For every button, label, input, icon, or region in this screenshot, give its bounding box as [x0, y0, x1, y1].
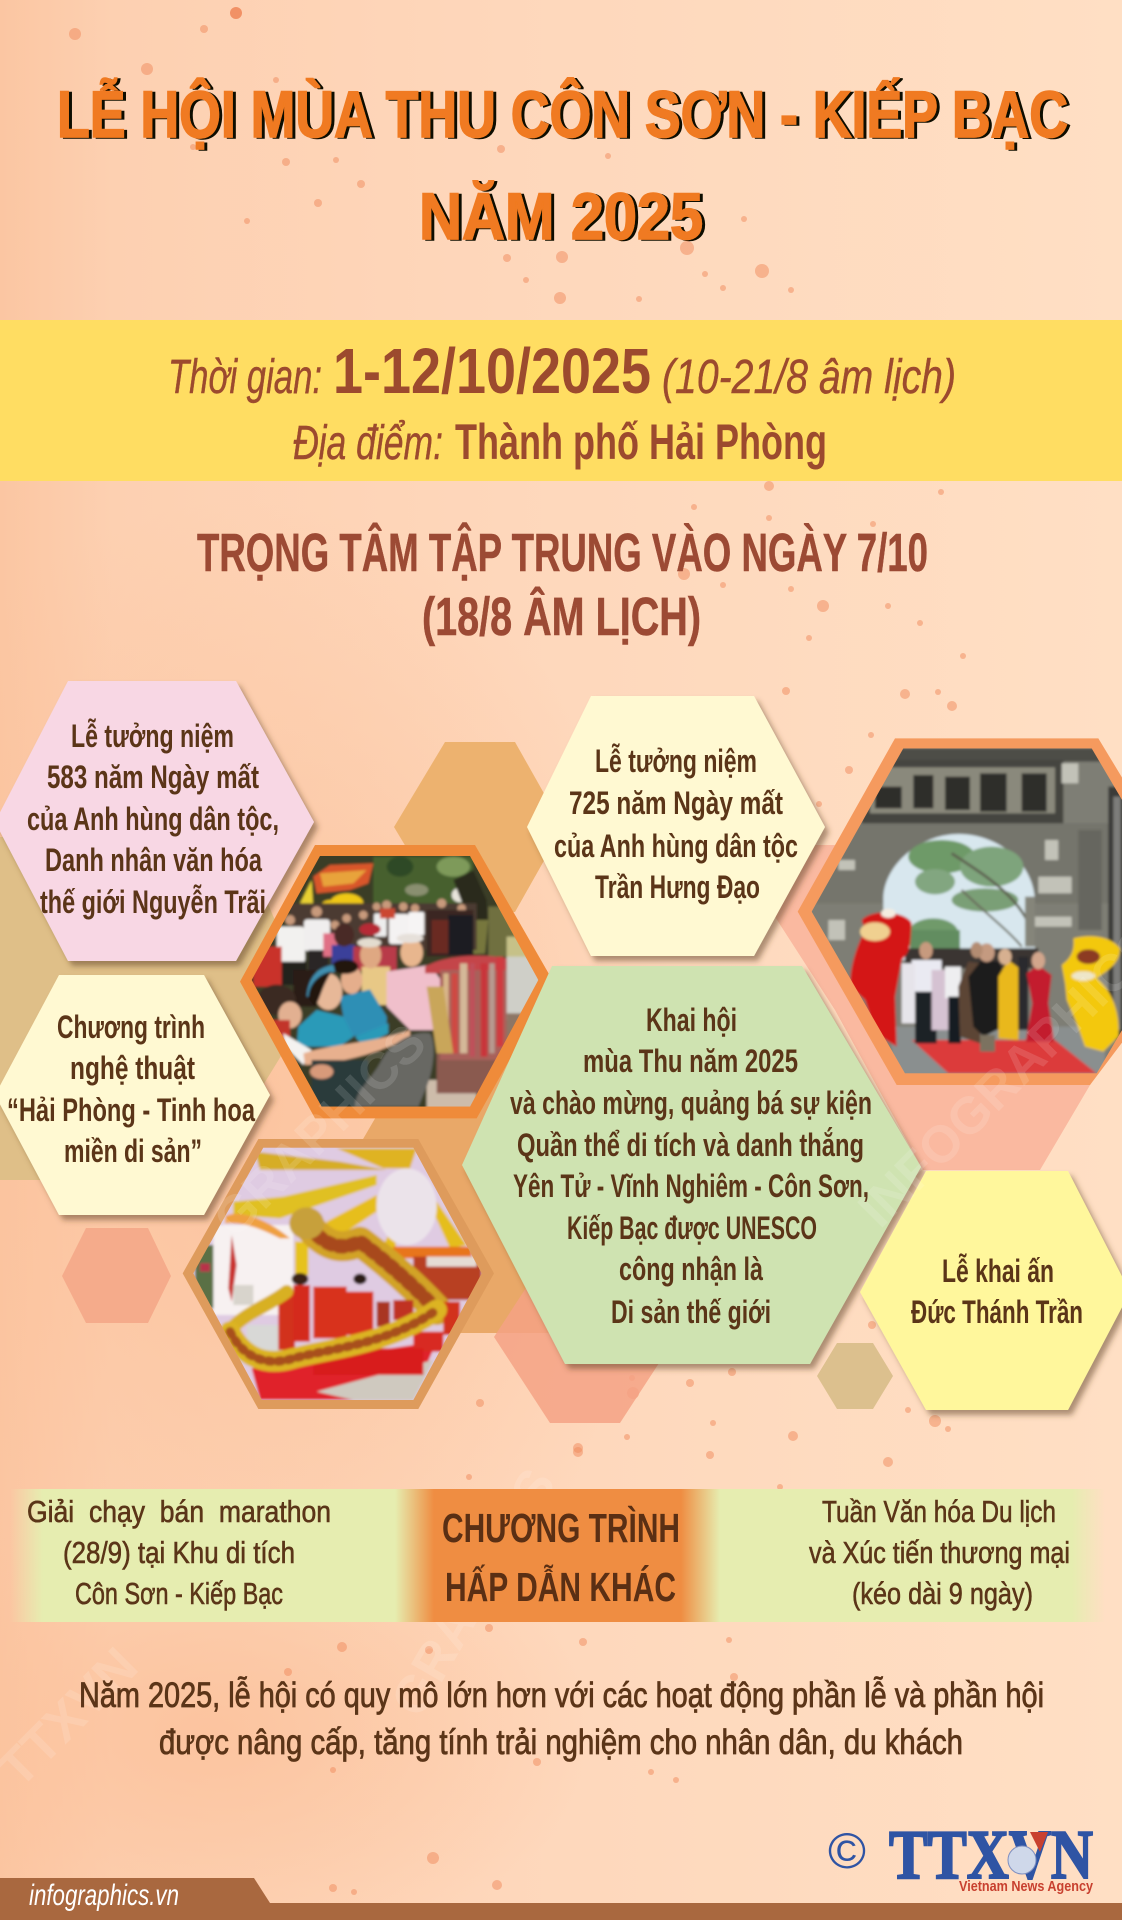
panel: art programme: miền di sản” [64, 1133, 202, 1169]
upper dragon body [308, 1225, 437, 1310]
watermarks [0, 916, 1122, 1798]
photo: dragon dance [180, 1135, 500, 1422]
right programme: tourism and trade week: Tuần Văn hóa Du lịch [822, 1494, 1056, 1529]
yellow time and place band: (10-21/8 âm lịch) [662, 351, 956, 404]
panel: autumn festival opening: Kiếp Bạc được UNESCO [567, 1210, 817, 1246]
summary text: được nâng cấp, tăng tính trải nghiệm cho nhân dân, du khách [159, 1723, 963, 1762]
footer site name: infographics.vn [29, 1879, 179, 1912]
photo: gate with lion dance [795, 730, 1122, 1097]
panel: autumn festival opening: Di sản thế giới [611, 1294, 771, 1330]
right programme: tourism and trade week [809, 1494, 1070, 1611]
watermarks: GRAPHICS [202, 1013, 438, 1248]
other programmes band [10, 1489, 1105, 1622]
panel: Trần Hưng Đạo memorial: của Anh hùng dân tộc [554, 828, 798, 864]
yellow time and place band: Thành phố Hải Phòng [455, 414, 827, 470]
panel: Nguyễn Trãi memorial: của Anh hùng dân tộc, [27, 801, 279, 837]
panel: Nguyễn Trãi memorial: Danh nhân văn hóa [45, 842, 262, 878]
left programme: half marathon: (28/9) tại Khu di tích [63, 1535, 295, 1570]
photo: incense offering ceremony [240, 840, 560, 1127]
panel: autumn festival opening: Yên Tử - Vĩnh Nghiêm - Côn Sơn, [513, 1168, 869, 1204]
panel: Trần Hưng Đạo memorial: 725 năm Ngày mất [569, 785, 783, 821]
yellow time and place band [0, 320, 1122, 481]
logo: TTXVN copyright: © [828, 1823, 866, 1879]
title [57, 77, 1068, 253]
panel: art programme: nghệ thuật [70, 1050, 195, 1086]
panel: Trần Hưng Đạo memorial: Trần Hưng Đạo [595, 869, 760, 905]
panel: autumn festival opening: và chào mừng, quảng bá sự kiện [510, 1085, 872, 1121]
right programme: tourism and trade week: (kéo dài 9 ngày) [852, 1576, 1033, 1611]
centre heading: other attractive programmes [442, 1505, 680, 1610]
yellow time and place band: Thời gian: [168, 351, 322, 404]
heading: focus date: (18/8 ÂM LỊCH) [422, 586, 701, 647]
watermarks: GRAPHICS [380, 1459, 568, 1726]
centre heading: other attractive programmes: CHƯƠNG TRÌNH [442, 1505, 680, 1551]
panel: autumn festival opening: công nhận là [619, 1251, 763, 1287]
panel: Trần Hưng Đạo memorial [527, 696, 825, 956]
panel: art programme: Chương trình [57, 1009, 205, 1045]
speckles [69, 7, 966, 1895]
decorative background hexagons [0, 742, 1122, 1423]
panel: art programme: “Hải Phòng - Tinh hoa [7, 1092, 255, 1128]
summary text [79, 1676, 1044, 1762]
right programme: tourism and trade week: và Xúc tiến thương mại [809, 1535, 1070, 1570]
panel: Đức Thánh Trần seal ceremony: Lễ khai ấn [942, 1253, 1054, 1289]
heading: focus date [197, 522, 928, 647]
centre heading: other attractive programmes: HẤP DẪN KHÁC [445, 1564, 676, 1610]
panel: autumn festival opening: mùa Thu năm 2025 [583, 1043, 798, 1079]
yellow time and place band: 1-12/10/2025 [333, 335, 651, 407]
panel: art programme [0, 975, 270, 1215]
panel: Nguyễn Trãi memorial: thế giới Nguyễn Trãi [40, 884, 266, 920]
left programme: half marathon: Côn Sơn - Kiếp Bạc [75, 1576, 283, 1611]
left programme: half marathon: Giải chạy bán marathon [27, 1494, 331, 1529]
logo: TTXVN copyright: Vietnam News Agency [959, 1878, 1094, 1895]
panel: Nguyễn Trãi memorial: Lễ tưởng niệm [71, 718, 234, 754]
panel: autumn festival opening: Khai hội [646, 1002, 737, 1038]
left programme: half marathon [27, 1494, 331, 1611]
panel: Nguyễn Trãi memorial [0, 681, 314, 961]
title: NĂM 2025 [419, 179, 703, 253]
panel: Đức Thánh Trần seal ceremony [860, 1171, 1122, 1410]
panel: Trần Hưng Đạo memorial: Lễ tưởng niệm [595, 743, 757, 779]
yellow time and place band: Địa điểm: [293, 417, 443, 470]
footer bar [0, 1878, 1122, 1920]
panel: autumn festival opening [462, 966, 921, 1364]
logo: TTXVN copyright [828, 1817, 1094, 1895]
panel: autumn festival opening: Quần thể di tích và danh thắng [517, 1127, 864, 1163]
panel: Nguyễn Trãi memorial: 583 năm Ngày mất [47, 759, 259, 795]
